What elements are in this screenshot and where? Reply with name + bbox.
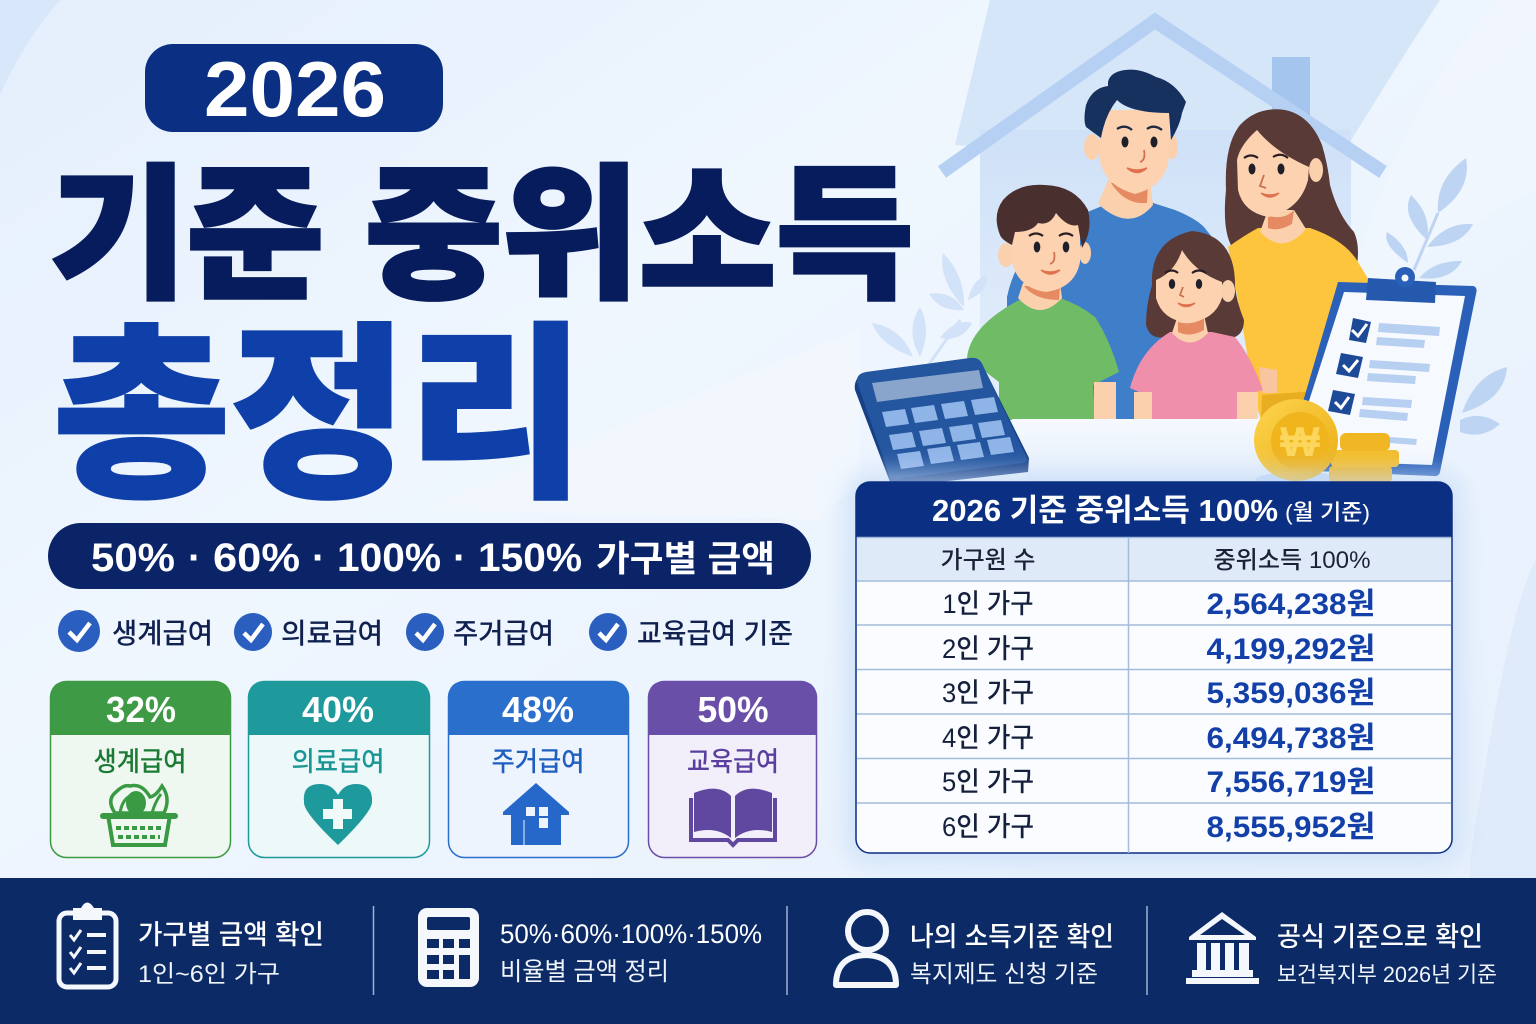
card: 주거급여 48%: 주거급여	[492, 747, 584, 777]
check: 교육급여 기준	[589, 613, 793, 651]
illustration: left leaves	[872, 253, 987, 370]
icon: heart with cross	[304, 784, 372, 845]
card: 생계급여 32%: 생계급여	[94, 747, 186, 777]
footer item: 가구별 금액 확인	[59, 902, 324, 988]
subtitle pill: ·	[312, 536, 325, 580]
row: 2인 가구: 2인 가구	[942, 634, 1034, 664]
illustration: boy	[967, 185, 1119, 420]
check: 의료급여: 의료급여	[281, 618, 383, 649]
footer item: 가구별 금액 확인: 가구별 금액 확인	[138, 920, 324, 950]
row: 2인 가구: 4,199,292원	[1206, 633, 1376, 666]
row: 3인 가구	[942, 677, 1376, 710]
check: 생계급여	[58, 610, 213, 652]
footer item: 가구별 금액 확인: 1인~6인 가구	[138, 961, 280, 988]
illustration: house background	[942, 21, 1383, 430]
title line 1: 기준 중위소득	[50, 155, 913, 317]
card: 교육급여 50%	[648, 682, 816, 858]
card: 의료급여 40%: 의료급여	[292, 747, 384, 777]
icon: clipboard	[59, 902, 116, 987]
check: 생계급여: 생계급여	[112, 618, 213, 649]
subtitle pill: ·	[453, 536, 466, 580]
row: 6인 가구	[942, 811, 1376, 844]
footer item: 공식 기준으로 확인: 보건복지부 2026년 기준	[1277, 962, 1497, 987]
row: 6인 가구: 8,555,952원	[1206, 811, 1376, 844]
card: 교육급여 50%: 50%	[698, 689, 768, 730]
card: 의료급여 40%	[248, 682, 430, 858]
illustration: coins	[1254, 399, 1399, 482]
card: 생계급여 32%	[50, 682, 230, 858]
icon: government building	[1186, 912, 1259, 984]
subtitle pill: ·	[188, 536, 201, 580]
footer item: 나의 소득기준 확인	[836, 912, 1114, 988]
icon: calculator	[418, 908, 479, 987]
title line 2: 총정리	[53, 311, 585, 521]
table title bar: (월 기준)	[1285, 500, 1370, 525]
footer item: 공식 기준으로 확인	[1186, 912, 1497, 987]
footer item: 나의 소득기준 확인: 복지제도 신청 기준	[910, 961, 1098, 988]
subtitle pill	[48, 523, 811, 589]
row: 3인 가구: 3인 가구	[942, 678, 1034, 708]
illustration: girl	[1130, 231, 1263, 420]
row: 1인 가구: 2,564,238원	[1206, 588, 1376, 621]
card: 주거급여 48%	[448, 682, 628, 858]
check: 주거급여	[406, 613, 554, 651]
illustration: calculator	[855, 358, 1029, 487]
benefit checklist	[58, 610, 793, 652]
illustration: right leaves	[1386, 158, 1507, 435]
illustration: mother	[1225, 109, 1372, 420]
clipboard checkboxes	[1328, 318, 1371, 415]
row: 3인 가구: 5,359,036원	[1206, 677, 1376, 710]
row: 4인 가구: 6,494,738원	[1206, 722, 1376, 755]
row: 5인 가구	[942, 766, 1376, 799]
table column header: 중위소득 100%	[1214, 547, 1370, 574]
card: 주거급여 48%: 48%	[502, 689, 574, 730]
subtitle pill: 60%	[213, 536, 300, 580]
card: 의료급여 40%: 40%	[302, 689, 374, 730]
icon: person	[836, 912, 896, 985]
row: 5인 가구: 7,556,719원	[1206, 766, 1376, 799]
check: 주거급여: 주거급여	[453, 618, 554, 649]
footer item: 50%·60%·100%·150%	[418, 908, 762, 987]
2026 badge	[145, 44, 443, 133]
table title bar	[856, 482, 1452, 537]
row: 4인 가구: 4인 가구	[942, 723, 1034, 753]
subtitle pill: 50%	[91, 536, 175, 580]
row: 2인 가구	[942, 633, 1376, 666]
card: 교육급여 50%: 교육급여	[687, 747, 779, 777]
table column header: 가구원 수	[940, 547, 1036, 574]
subtitle pill: 100%	[337, 536, 441, 580]
panel: median income table	[845, 472, 1463, 864]
row: 4인 가구	[942, 722, 1376, 755]
icon: vegetable basket	[103, 785, 175, 845]
2026 badge: 2026	[204, 45, 386, 133]
illustration: coins: ₩	[1280, 418, 1320, 465]
footer item: 공식 기준으로 확인: 공식 기준으로 확인	[1277, 922, 1483, 952]
table column header	[857, 537, 1451, 581]
icon: open book	[691, 789, 775, 845]
row: 5인 가구: 5인 가구	[942, 767, 1034, 797]
check: 의료급여	[234, 613, 383, 651]
subtitle pill: 150%	[478, 536, 582, 580]
row: 1인 가구: 1인 가구	[942, 589, 1034, 619]
footer item: 50%·60%·100%·150%: 비율별 금액 정리	[500, 958, 669, 986]
row: 6인 가구: 6인 가구	[942, 812, 1034, 842]
card: 생계급여 32%: 32%	[106, 689, 176, 730]
row: 1인 가구	[942, 588, 1376, 621]
footer item: 50%·60%·100%·150%: 50%·60%·100%·150%	[500, 919, 762, 949]
footer bar	[0, 878, 1536, 1024]
illustration: clipboard	[1286, 267, 1477, 476]
illustration: table surface	[1012, 419, 1345, 488]
illustration: father	[1007, 70, 1230, 420]
footer item: 나의 소득기준 확인: 나의 소득기준 확인	[910, 922, 1114, 952]
table title bar: 2026 기준 중위소득 100%	[932, 493, 1278, 528]
subtitle pill: 가구별 금액	[596, 538, 775, 579]
icon: house	[503, 783, 569, 845]
check: 교육급여 기준: 교육급여 기준	[637, 618, 793, 649]
